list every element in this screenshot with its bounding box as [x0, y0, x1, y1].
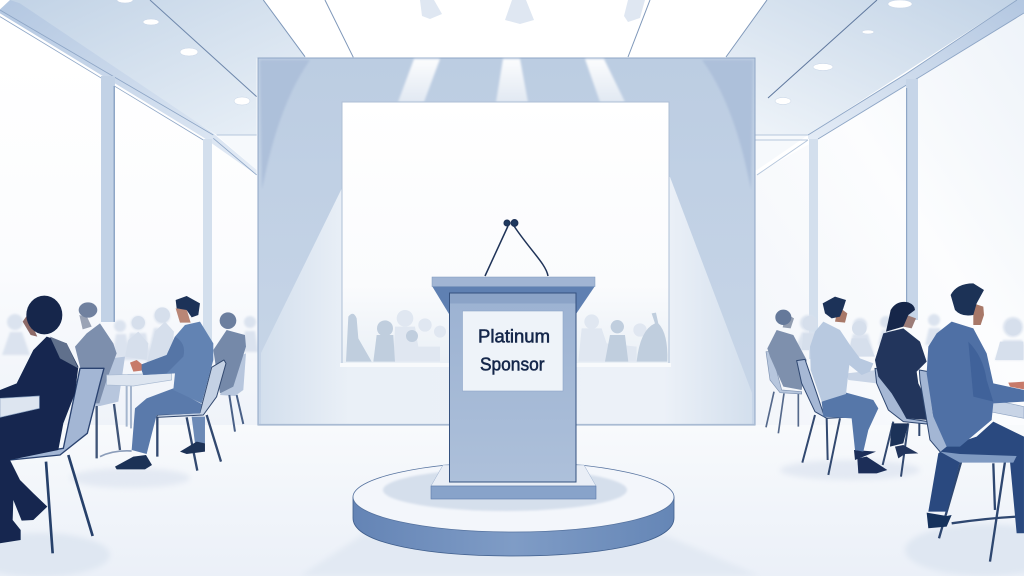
table	[847, 370, 877, 383]
background silhouettes: left	[2, 308, 258, 362]
window columns	[101, 76, 918, 359]
person: woman in dark dress with chair	[0, 296, 104, 553]
sponsor sign: Sponsor	[480, 354, 544, 374]
stage spotlights	[420, 0, 645, 24]
backdrop screen	[340, 102, 671, 367]
sponsor sign: Platinum	[478, 326, 550, 346]
ceiling lights	[117, 0, 912, 105]
table front	[987, 398, 1024, 418]
podium top shade	[450, 294, 576, 304]
ceiling: right panels and beam	[628, 0, 1024, 175]
person: man in light shirt with chair	[797, 297, 887, 475]
person: far man with chair	[213, 312, 246, 432]
ceiling: left panels and beam	[0, 0, 353, 175]
background silhouettes: right	[795, 314, 1024, 360]
podium base	[431, 465, 596, 499]
person: grey man with chair	[75, 302, 125, 458]
person: far grey man with chair	[766, 310, 807, 433]
stage backdrop frame	[258, 58, 755, 425]
table	[100, 373, 172, 457]
ghost attendees	[802, 316, 1023, 360]
floor light and shadows	[0, 460, 1024, 576]
attendees: right group	[766, 283, 1024, 562]
round stage platform	[353, 462, 674, 556]
podium top shelf	[432, 277, 595, 314]
sponsor sign	[462, 311, 563, 391]
person: man in blue suit with chair	[919, 283, 1024, 562]
attendees: left group	[0, 296, 246, 553]
podium	[431, 220, 596, 499]
person: man in blue suit with chair	[115, 296, 226, 471]
person: woman in dark top with chair	[875, 302, 928, 477]
screen silhouettes	[346, 310, 667, 362]
ghost attendees	[125, 307, 174, 363]
microphone	[485, 220, 548, 276]
podium body	[450, 293, 576, 482]
